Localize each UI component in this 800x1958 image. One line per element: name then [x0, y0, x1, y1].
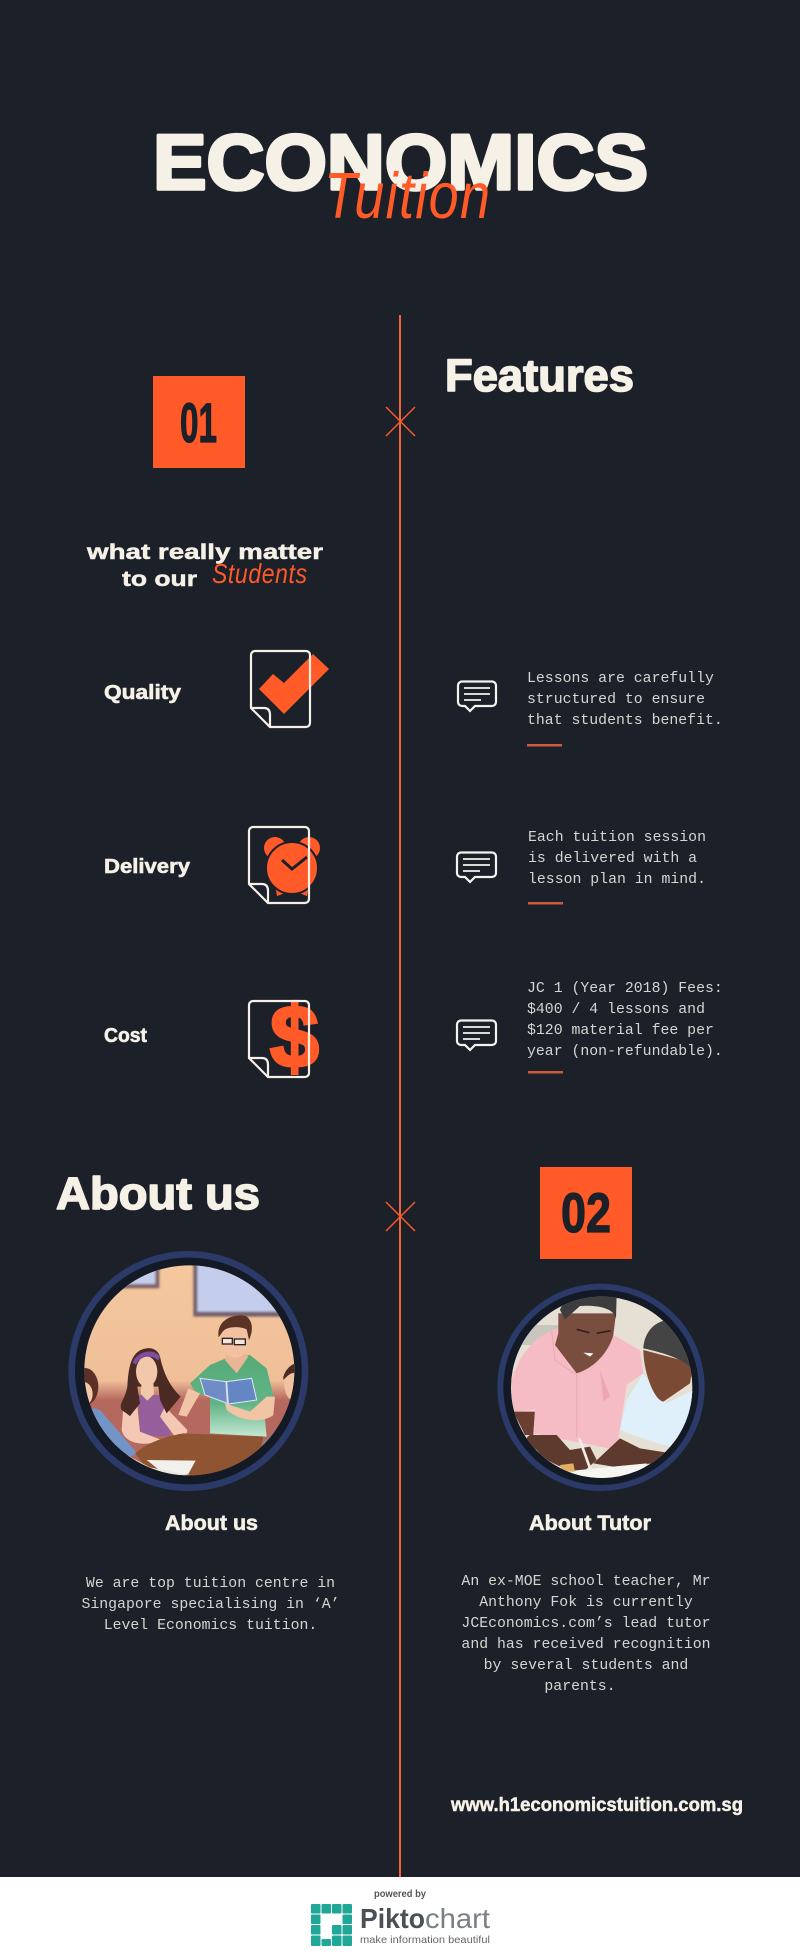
icon: piktochart logo	[311, 1904, 352, 1946]
label: delivery: Delivery	[104, 856, 191, 878]
text block: delivery: Each tuition session	[528, 830, 706, 846]
footer: piktochart	[0, 1877, 800, 1958]
text block: fees: JC 1 (Year 2018) Fees:	[527, 981, 723, 997]
text block: delivery: lesson plan in mind.	[528, 872, 706, 888]
number badge 02	[540, 1167, 632, 1259]
number badge 01: 01	[180, 391, 217, 454]
girl	[138, 1395, 171, 1437]
icon: speech bubble 2	[457, 852, 496, 882]
text block: about tutor: An ex-MOE school teacher, Mr	[461, 1574, 711, 1590]
table	[135, 1433, 263, 1478]
text block: fees	[527, 981, 723, 1060]
text block: delivery	[528, 830, 706, 888]
text block: about us: Level Economics tuition.	[104, 1618, 317, 1634]
footer: piktochart: Pikto	[360, 1903, 425, 1934]
title: ECONOMICS	[153, 118, 648, 206]
photo: classroom group in ring	[72, 1254, 305, 1488]
icon: speech bubble 1	[458, 682, 496, 711]
footer: piktochart: make information beautiful	[360, 1934, 490, 1946]
text block: about tutor: by several students and	[484, 1658, 688, 1674]
icon: document with dollar	[249, 987, 319, 1086]
title: Tuition	[324, 159, 490, 232]
rule 2	[528, 902, 563, 904]
man	[190, 1355, 274, 1437]
text block: about us: Singapore specialising in ‘A’	[81, 1597, 340, 1613]
text block: lessons: that students benefit.	[527, 713, 723, 729]
text block: about tutor: Anthony Fok is currently	[479, 1595, 693, 1611]
text block: about tutor: parents.	[544, 1679, 616, 1695]
cross marker: features	[386, 407, 415, 436]
rule 3	[528, 1071, 563, 1074]
photo: tutor with student in ring	[500, 1287, 702, 1488]
cross marker: about	[386, 1202, 415, 1231]
icon: document with check	[251, 651, 329, 727]
text block: about us	[81, 1576, 340, 1634]
text block: fees: $120 material fee per	[527, 1023, 714, 1039]
heading: features: Features	[445, 350, 634, 401]
text block: delivery: is delivered with a	[528, 851, 697, 867]
subheading: what really matter to our students	[86, 541, 323, 591]
heading: about us small: About us	[165, 1512, 258, 1535]
text block: lessons	[527, 671, 723, 729]
footer: piktochart: powered by	[374, 1888, 426, 1900]
text block: lessons: structured to ensure	[527, 692, 705, 708]
icon: document with dollar: $	[270, 987, 319, 1086]
label: cost: Cost	[104, 1025, 147, 1047]
rule 1	[527, 744, 562, 746]
text block: about tutor: JCEconomics.com’s lead tutor	[461, 1616, 711, 1632]
left person	[91, 1408, 136, 1457]
text block: lessons: Lessons are carefully	[527, 671, 714, 687]
subheading: what really matter to our students: to our	[122, 568, 197, 591]
footer: piktochart: chart	[425, 1903, 490, 1934]
number badge 01	[153, 376, 245, 468]
text block: fees: $400 / 4 lessons and	[527, 1002, 705, 1018]
text block: about tutor	[461, 1574, 711, 1695]
heading: about us: About us	[56, 1168, 260, 1219]
icon: speech bubble 3	[457, 1020, 496, 1050]
center timeline	[399, 315, 401, 1877]
heading: about tutor: About Tutor	[529, 1512, 651, 1535]
label: quality: Quality	[104, 682, 182, 704]
right person	[263, 1430, 276, 1444]
text block: about us: We are top tuition centre in	[86, 1576, 335, 1592]
website url: www.h1economicstuition.com.sg	[450, 1795, 743, 1816]
text block: about tutor: and has received recognition	[461, 1637, 711, 1653]
subheading: what really matter to our students: Students	[212, 559, 307, 590]
icon: document with alarm clock	[249, 827, 320, 903]
text block: fees: year (non-refundable).	[527, 1044, 723, 1060]
subheading: what really matter to our students: what really matter	[86, 541, 323, 564]
number badge 02: 02	[561, 1181, 611, 1244]
